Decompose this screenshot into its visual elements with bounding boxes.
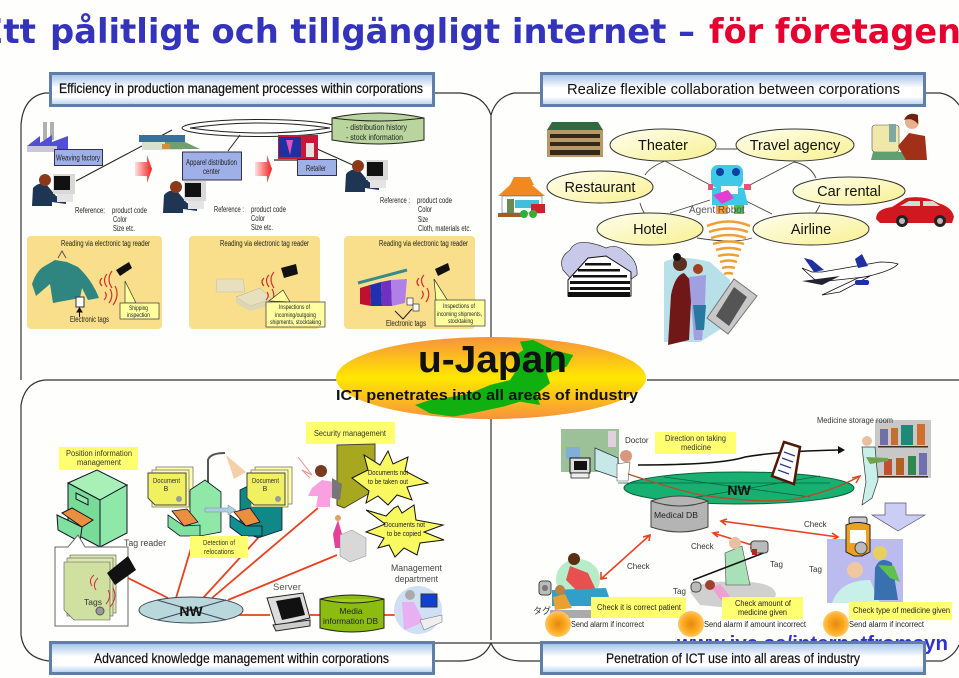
panel: knowledge management	[55, 422, 444, 634]
panel: tag reader jacket: Electronic tags	[70, 315, 109, 324]
image: doctor room	[561, 429, 632, 481]
icon: couple with handheld device	[664, 253, 757, 345]
reference text 1: product code	[112, 206, 147, 215]
icon: red car	[876, 197, 954, 227]
arrow: purple down	[872, 503, 925, 531]
callout: documents not to be taken out: Documents not	[368, 470, 408, 477]
icon: travel agent at computer	[871, 114, 927, 160]
note: detection of relocations	[190, 536, 248, 558]
label: doctor: Doctor	[625, 436, 649, 445]
callout: documents not to be copied	[366, 505, 444, 557]
network links red	[126, 508, 396, 615]
panel: tag reader jacket	[27, 236, 162, 329]
header: penetration of ICT	[540, 641, 926, 675]
reference text 3: Color	[418, 205, 432, 214]
reference text 1: Size etc.	[113, 224, 135, 233]
agent network lines	[640, 149, 820, 241]
reference text 3: Cloth, materials etc.	[418, 224, 471, 233]
pill: Theater	[610, 129, 716, 161]
URL text: www.iva.se/internetfromsyn	[676, 633, 948, 655]
note: security management: Security management	[314, 429, 387, 438]
labels: check: Check	[627, 562, 651, 571]
reference text 1: Reference:	[75, 206, 105, 215]
panel: production management	[27, 113, 485, 329]
note: check it is correct patient: Check it is correct patient	[597, 603, 682, 612]
header: knowledge management	[49, 641, 435, 675]
reference text 3: product code	[417, 196, 452, 205]
panel: tag reader clothing rack: incoming shipments,	[437, 311, 482, 318]
icon: person at computer 3	[345, 160, 388, 192]
label: apparel distribution center: center	[203, 167, 220, 176]
icon: filing cabinet with open drawer	[57, 470, 127, 547]
reference text 1: Color	[113, 215, 127, 224]
panel: tag reader boxes	[189, 236, 325, 329]
panel: ICT in industry	[533, 416, 952, 637]
callout: documents not to be taken out	[352, 451, 428, 505]
icon: hotel building	[562, 242, 637, 297]
panel: tag reader jacket: Reading via electronic tag reader	[61, 239, 150, 248]
page title: pålitligt och tillgängligt internet –	[50, 12, 695, 52]
icon: pharmacist and shelves	[862, 420, 931, 505]
labels: check: Check	[804, 520, 828, 529]
database: media information: information DB	[323, 616, 378, 626]
labels: check: Tag	[770, 560, 783, 569]
note: detection of relocations: relocations	[204, 547, 234, 556]
pill: Airline	[753, 213, 869, 245]
labels: check: Tag	[809, 565, 822, 574]
reference text 2: Size etc.	[251, 223, 273, 232]
icon: person at computer 2	[163, 181, 206, 213]
pill: Airline: Airline	[791, 222, 831, 238]
panel: tag reader boxes: shipments, stocktaking	[270, 319, 321, 326]
map of Japan	[415, 340, 573, 417]
panel: tag reader clothing rack: Electronic tags	[386, 319, 426, 328]
database: distribution history: - distribution history	[346, 122, 408, 132]
database: distribution history	[332, 113, 424, 144]
icon: teal cabinet	[230, 485, 282, 538]
callout: tags: Tags	[84, 597, 102, 607]
icon: lamp reader	[208, 453, 246, 484]
panel: tag reader jacket: Shipping	[129, 305, 148, 312]
icon: weaving factory	[27, 122, 68, 152]
icon: robot	[708, 165, 751, 214]
label: retailer	[298, 160, 336, 176]
label: management department: department	[395, 574, 438, 584]
note: security management	[306, 422, 395, 444]
panel: tag reader clothing rack: Reading via electronic tag reader	[379, 239, 468, 248]
icon: security woman	[298, 457, 342, 507]
label: tag reader: Tag reader	[124, 538, 166, 548]
note: check amount of medicine given	[722, 597, 803, 619]
icon: management operator	[394, 586, 442, 634]
note: check it is correct patient	[591, 597, 686, 618]
panel: tag reader jacket: inspection	[127, 312, 150, 319]
header: flexible collaboration: Realize flexible collaboration between corporations	[567, 82, 900, 98]
reference text 2: Color	[251, 214, 265, 223]
network NW: NW	[179, 603, 203, 619]
header: efficiency	[49, 72, 435, 107]
tagline: ICT penetrates into all areas of industry	[336, 387, 639, 404]
arrows: check red	[601, 519, 838, 579]
icon: Document B stack right: B	[263, 486, 268, 493]
reference text 3: Size	[418, 215, 428, 224]
note: position information management: management	[77, 458, 122, 467]
arrow: order curve	[628, 474, 860, 501]
reference text 3	[380, 196, 471, 233]
network NW	[139, 597, 243, 623]
panel: tag reader boxes: Inspections of	[279, 304, 310, 311]
arrow: red 2	[255, 155, 272, 183]
reference text 2: product code	[251, 205, 286, 214]
icon: warehouse	[139, 135, 200, 150]
database: distribution history: - stock information	[346, 132, 403, 142]
image: patient and nurse	[827, 539, 903, 603]
labels: check: Tag	[673, 587, 686, 596]
note: direction on taking medicine: Direction on taking	[665, 434, 726, 443]
header: efficiency: Efficiency in production management processes within corporations	[59, 81, 423, 96]
note: position information management	[59, 447, 138, 470]
panel: tag reader clothing rack	[344, 236, 485, 329]
reference text 1	[75, 206, 147, 233]
alarm 3	[823, 611, 925, 637]
icon: nurse and patient bed	[690, 537, 776, 608]
reference text 3: Reference :	[380, 196, 410, 205]
alarm 3: Send alarm if incorrect	[849, 620, 925, 629]
labels: check	[533, 520, 828, 616]
pill: Travel agency	[736, 129, 854, 161]
alarm 2	[678, 611, 807, 637]
icon: door	[337, 444, 375, 508]
icon: medicine bottle	[846, 517, 870, 556]
panel: tag reader boxes: Reading via electronic tag reader	[220, 239, 309, 248]
network ellipse and links	[76, 120, 355, 181]
label: Agent Robot: Agent Robot	[689, 205, 745, 216]
panel: flexible collaboration	[498, 114, 954, 345]
labels: check: Check	[691, 542, 715, 551]
note: check amount of medicine given: medicine given	[738, 608, 787, 617]
icon: person at computer 1	[32, 174, 75, 206]
icon: retailer shop	[274, 135, 318, 161]
callout: documents not to be copied: Documents not	[384, 522, 425, 529]
icon: theater building	[547, 122, 603, 157]
arrow: direction line	[638, 446, 845, 465]
icon: clipboard	[772, 442, 800, 484]
panel: tag reader clothing rack: Inspections of	[443, 303, 475, 310]
icon: server computer	[267, 593, 310, 631]
pill: Restaurant	[547, 171, 653, 203]
labels: check: タグ	[533, 605, 551, 616]
network NW green	[618, 472, 854, 504]
callout: documents not to be copied: to be copied	[387, 531, 421, 538]
note: check type of medicine given	[849, 602, 952, 620]
database: media information: Media	[339, 606, 363, 616]
alarm 1	[545, 611, 645, 637]
note: position information management: Position information	[66, 449, 132, 458]
icon: Document B stack right	[247, 467, 292, 507]
note: check amount of medicine given: Check amount of	[735, 599, 792, 608]
pill: Hotel	[597, 213, 703, 245]
note: detection of relocations: Detection of	[203, 538, 236, 547]
label: weaving factory	[54, 150, 102, 166]
label: server: Server	[273, 582, 301, 592]
note: direction on taking medicine: medicine	[681, 443, 711, 452]
page title	[0, 12, 959, 52]
icon: Document B stack left: B	[164, 486, 169, 493]
u-Japan wordmark: u-Japan	[418, 339, 567, 381]
label: management department: Management	[391, 563, 442, 573]
label: apparel distribution center	[182, 152, 242, 180]
pill: Hotel: Hotel	[633, 222, 667, 238]
pill: Car rental	[793, 177, 905, 205]
icon: airplane	[802, 254, 898, 295]
pill: Restaurant: Restaurant	[565, 180, 635, 196]
database: media information	[320, 595, 384, 632]
network NW green: NW	[727, 482, 751, 498]
icon: Document B stack left	[148, 467, 193, 507]
pill: Theater: Theater	[638, 138, 688, 154]
header: penetration of ICT: Penetration of ICT use into all areas of industry	[606, 651, 860, 666]
icon: Document B stack right: Document	[252, 478, 279, 485]
reference text 2: Reference :	[214, 205, 244, 214]
pill: Car rental: Car rental	[817, 184, 881, 200]
icon: green cabinet	[168, 480, 221, 536]
icon: woman at copier	[333, 515, 366, 562]
callout: tags	[55, 535, 136, 626]
note: direction on taking medicine	[655, 432, 736, 454]
header: knowledge management: Advanced knowledge management within corporations	[94, 651, 389, 666]
icon: Document B stack left: Document	[153, 478, 180, 485]
icon: mother and child	[539, 553, 612, 618]
note: check type of medicine given: Check type of medicine given	[853, 606, 950, 615]
label: retailer: Retailer	[306, 164, 326, 173]
central oval: u-Japan	[336, 337, 646, 419]
reference text 2	[214, 205, 286, 232]
label: weaving factory: Weaving factory	[56, 154, 100, 162]
panel: tag reader clothing rack: stocktaking	[448, 318, 473, 325]
icon: signal waves	[707, 222, 750, 274]
icon: restaurant	[498, 177, 545, 218]
pill: Travel agency: Travel agency	[750, 138, 841, 154]
label: apparel distribution center: Apparel distribution	[186, 158, 237, 167]
label: management department	[391, 563, 442, 584]
arrow: relocation	[205, 505, 236, 515]
database: medical DB	[651, 496, 708, 532]
alarm 2: Send alarm if amount incorrect	[704, 620, 807, 629]
callout: documents not to be taken out: to be taken out	[368, 479, 408, 486]
database: medical DB: Medical DB	[654, 510, 698, 520]
label: medicine storage room: Medicine storage room	[817, 416, 893, 425]
panel: tag reader boxes: incoming/outgoing	[275, 312, 316, 319]
header: flexible collaboration	[540, 72, 926, 107]
page title: för företagen	[709, 12, 959, 52]
alarm 1: Send alarm if incorrect	[571, 620, 645, 629]
arrow: red 1	[135, 155, 152, 183]
